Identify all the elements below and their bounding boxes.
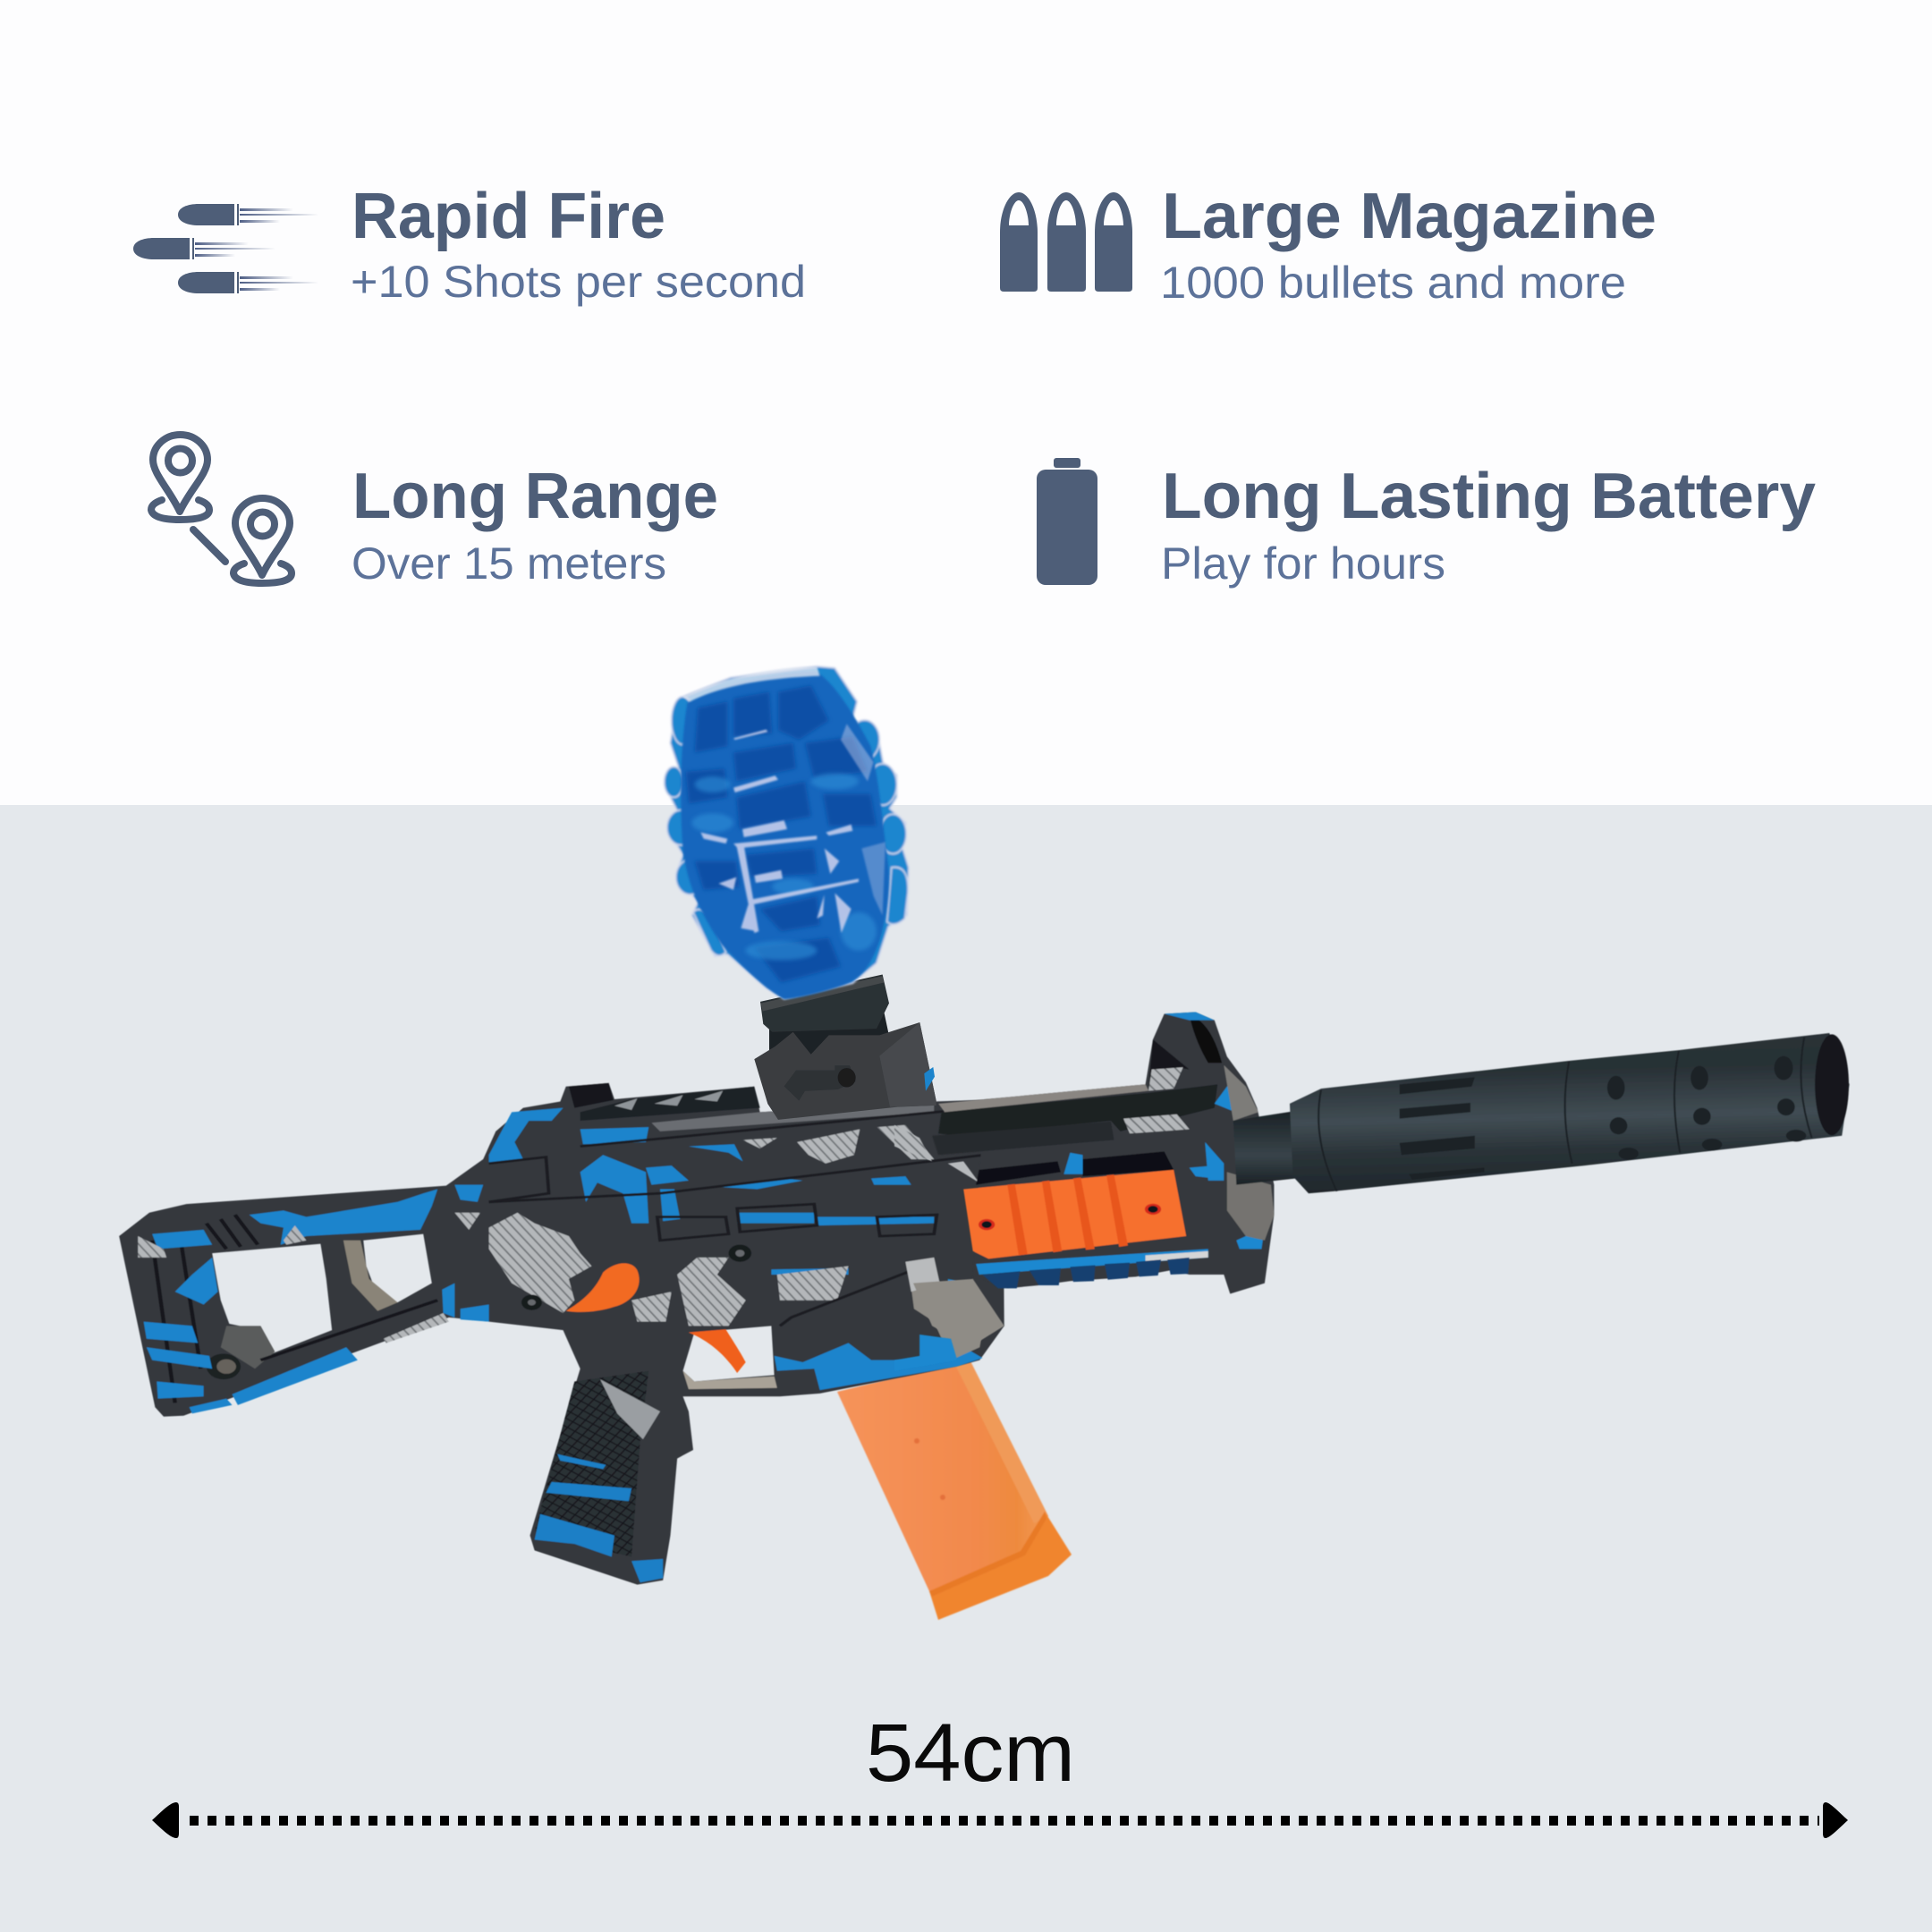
- grenade body: [681, 671, 889, 999]
- grenade outer gel lumps: [665, 666, 909, 999]
- grenade feed neck and adapter: [754, 974, 936, 1120]
- stock inner guard highlight: [343, 1241, 398, 1311]
- orange trigger: [689, 1329, 746, 1373]
- grenade shadow cells: [686, 685, 877, 982]
- icon: three bullets: [1000, 192, 1132, 292]
- grenade pale top rim: [682, 666, 820, 701]
- text: play time: Play for hours: [1161, 538, 1445, 589]
- feature: rapid fire: [133, 181, 806, 307]
- magazine: [837, 1360, 1072, 1620]
- icon: two map pins: [151, 435, 292, 583]
- gel ball grenade hopper: [665, 666, 909, 999]
- icon: flying bullets: [133, 204, 318, 293]
- feature: long lasting battery: [1037, 458, 1816, 589]
- orange selector lever: [566, 1263, 640, 1312]
- text: range distance: Over 15 meters: [352, 538, 666, 589]
- orange picatinny rail: [963, 1170, 1186, 1258]
- background: lower grey panel: [0, 805, 1932, 1932]
- heading: rapid fire: Rapid Fire: [352, 181, 665, 252]
- panel lines: [489, 1106, 1003, 1326]
- suppressor: [1233, 1033, 1850, 1193]
- carbon camouflage patches: [138, 1125, 934, 1343]
- heading: long range: Long Range: [352, 461, 718, 532]
- stock black streaks: [152, 1215, 437, 1402]
- grenade light blue speckle: [691, 774, 877, 960]
- feature: large magazine: [1000, 181, 1657, 308]
- ammo-side bulge: [911, 1287, 984, 1360]
- background: upper white panel: [0, 0, 1932, 805]
- heading: large magazine: Large Magazine: [1162, 181, 1657, 252]
- feature: long range: [151, 435, 718, 589]
- pivot pins: [521, 1245, 751, 1310]
- dimension arrow: [152, 1802, 1848, 1838]
- trigger guard: [683, 1371, 777, 1389]
- grip texture: [535, 1371, 648, 1557]
- rail teeth: [982, 1258, 1190, 1288]
- front handguard and rail: [894, 1013, 1850, 1371]
- stock, receiver and grip: [119, 1083, 1004, 1585]
- icon: battery: [1037, 458, 1097, 585]
- top rail highlights: [651, 1101, 934, 1131]
- text: shots per second: +10 Shots per second: [351, 257, 806, 307]
- text: bullets count: 1000 bullets and more: [1160, 258, 1626, 308]
- blue camouflage: [144, 1108, 982, 1413]
- product image: gel blaster: [119, 666, 1850, 1799]
- dimension: length label: 54cm: [866, 1707, 1075, 1799]
- grenade highlights: [700, 724, 886, 933]
- heading: long lasting battery: Long Lasting Battery: [1162, 461, 1816, 532]
